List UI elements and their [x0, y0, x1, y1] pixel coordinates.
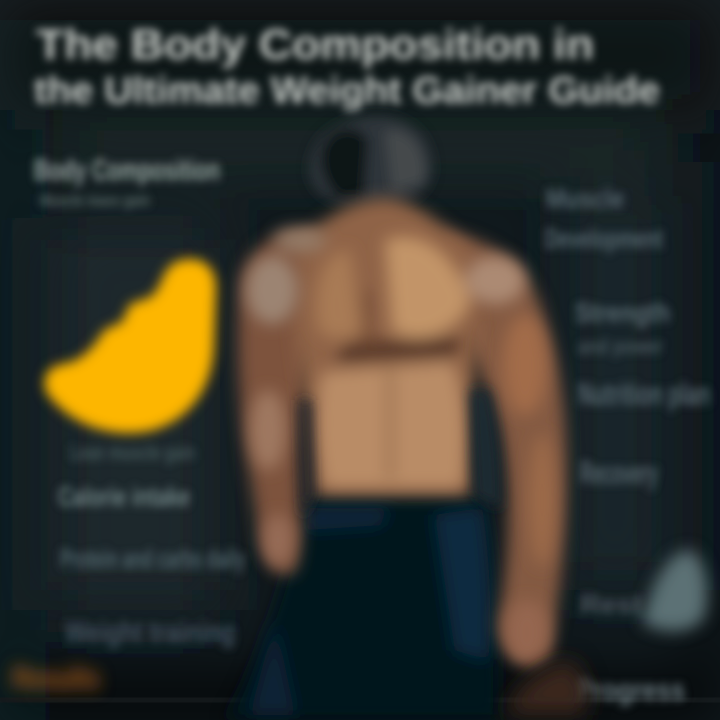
right text blocks: Strength	[575, 297, 670, 328]
left subheading: Muscle mass gain	[40, 191, 150, 210]
bottom shadow object	[505, 660, 588, 715]
torso	[295, 198, 478, 495]
right text blocks: Development	[545, 223, 663, 254]
left arm	[238, 232, 320, 575]
hair and head	[310, 116, 432, 205]
arm gaps	[298, 390, 501, 520]
left subheading: Body Composition	[34, 154, 220, 187]
left text blocks	[58, 440, 245, 649]
title: the Ultimate Weight Gainer Guide	[34, 70, 660, 112]
right text blocks	[545, 183, 710, 707]
highlights and muscle shading	[246, 228, 555, 664]
right text blocks: and power	[578, 334, 663, 359]
figure: muscular man	[225, 116, 567, 720]
title	[34, 21, 660, 112]
left text blocks: Calorie intake	[58, 481, 190, 512]
left text blocks: Weight training	[65, 616, 235, 649]
left text blocks: Protein and carbs daily	[60, 543, 245, 574]
icon: yellow leaf shape	[45, 259, 216, 433]
orange label: Results	[12, 660, 100, 696]
right text blocks: Muscle	[546, 183, 624, 214]
right text blocks: Progress	[575, 674, 685, 707]
icon: right lower figure	[642, 550, 707, 631]
right text blocks: Rest	[580, 589, 642, 620]
left subheading	[34, 154, 220, 210]
pants	[225, 496, 498, 720]
right arm	[440, 230, 567, 662]
right text blocks: Recovery	[580, 455, 658, 491]
left text blocks: Lean muscle gain	[70, 440, 195, 465]
title: The Body Composition in	[36, 21, 594, 69]
